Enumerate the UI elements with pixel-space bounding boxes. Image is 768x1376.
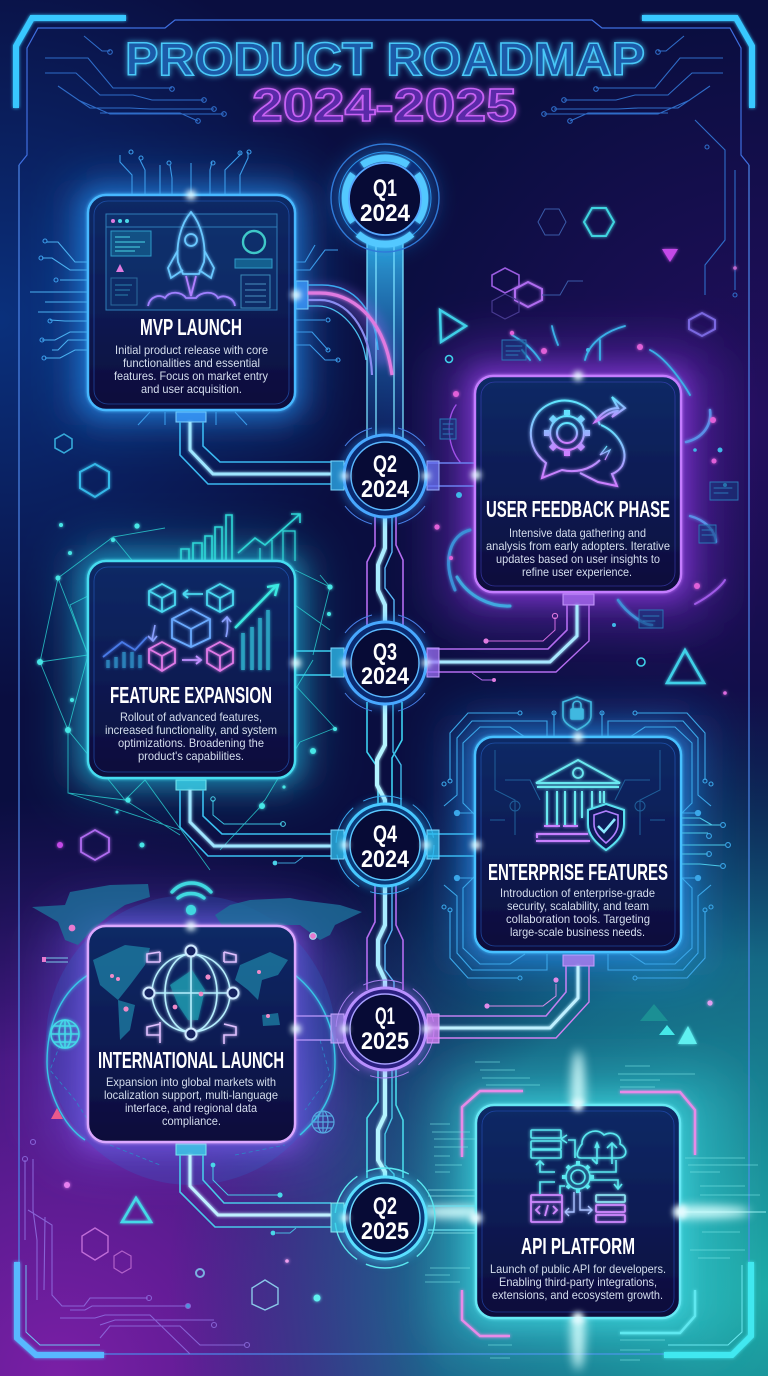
timeline node: Q4 2024: 2024	[361, 846, 410, 873]
panel: enterprise features	[475, 737, 681, 952]
description: updates based on user insights to	[496, 552, 660, 566]
description: Intensive data gathering and	[509, 526, 646, 540]
icon: API architecture	[531, 1130, 626, 1222]
connector: card 4 to Q1 2025	[428, 955, 594, 1038]
icon: globe with flags	[144, 946, 238, 1044]
decoration: hexagons and triangles	[55, 208, 715, 1310]
description: and user acquisition.	[141, 382, 242, 396]
description: extensions, and ecosystem growth.	[492, 1288, 663, 1302]
timeline node: Q2 2025: 2025	[361, 1218, 409, 1245]
timeline node: Q3 2024: Q3	[373, 639, 397, 666]
panel: international launch	[88, 926, 295, 1142]
corner circuit traces top	[45, 36, 737, 297]
description: Rollout of advanced features,	[120, 710, 262, 724]
panel: user feedback phase	[475, 376, 681, 592]
decoration: map inside card	[93, 945, 288, 1040]
description: refine user experience.	[522, 565, 632, 579]
icon: rocket dashboard	[106, 212, 277, 310]
heading: years: 2024-2025	[252, 79, 517, 131]
timeline node: Q4 2024	[331, 796, 439, 894]
description	[104, 1075, 278, 1128]
description: collaboration tools. Targeting	[506, 912, 650, 926]
heading: USER FEEDBACK PHASE	[486, 496, 670, 522]
decoration: card 6 pink frame and code	[425, 1062, 766, 1360]
description: increased functionality, and system	[105, 723, 277, 737]
description: Expansion into global markets with	[106, 1075, 276, 1089]
icon: small globe left	[51, 1020, 79, 1048]
heading: FEATURE EXPANSION	[110, 682, 272, 708]
icon: warning triangle	[51, 1108, 63, 1119]
decoration: dots	[64, 266, 737, 1302]
connector: card 1 to Q2 2024	[176, 412, 331, 484]
description: Enabling third-party integrations,	[499, 1275, 657, 1289]
description: features. Focus on market entry	[114, 369, 268, 383]
connector: card 1 to bus curve	[296, 281, 392, 375]
timeline node: Q2 2024	[331, 428, 439, 524]
bus glow	[375, 240, 395, 1180]
description	[114, 343, 268, 396]
timeline node: Q2 2024: Q2	[373, 451, 397, 478]
description: interface, and regional data	[125, 1101, 257, 1115]
decoration: card 4 circuit traces	[442, 711, 730, 980]
bus Q4 2024 to Q1 2025	[367, 885, 403, 990]
icon: map pins	[42, 925, 316, 962]
bus Q1 2025 to Q2 2025	[367, 1069, 403, 1178]
connector: card 3 to Q4 2024	[176, 780, 331, 865]
connector: card 5 to Q2 2025	[176, 1144, 331, 1235]
connector: Q2 2025 to card 6	[428, 1206, 476, 1230]
heading: product roadmap: PRODUCT ROADMAP	[125, 33, 645, 85]
description: optimizations. Broadening the	[118, 736, 264, 750]
bus Q1 2024 to Q2 2024	[367, 240, 403, 438]
icon: padlock shield	[563, 697, 591, 730]
timeline node: Q1 2025: 2025	[361, 1028, 409, 1055]
decoration: world map and sphere	[32, 883, 362, 1185]
connector: Q4 2024 to card 4	[428, 834, 476, 856]
description: analysis from early adopters. Iterative	[486, 539, 670, 553]
connector: Q2 2024 to card 2	[428, 463, 476, 486]
card 6 light burst	[415, 1050, 750, 1370]
description	[500, 886, 655, 939]
description: large-scale business needs.	[510, 925, 645, 939]
timeline node: Q2 2025	[331, 1168, 435, 1268]
heading: ENTERPRISE FEATURES	[488, 859, 668, 885]
bus Q3 2024 to Q4 2024	[367, 702, 402, 806]
description	[486, 526, 670, 579]
heading: INTERNATIONAL LAUNCH	[98, 1047, 284, 1073]
description: localization support, multi-language	[104, 1088, 278, 1102]
description: compliance.	[162, 1114, 221, 1128]
connector: card 2 to Q3 2024	[428, 594, 594, 682]
connector: card 3 to Q3 2024	[296, 651, 331, 675]
connectors: central timeline bus	[367, 240, 403, 1180]
icon: cubes and growth chart	[103, 584, 278, 671]
description: Launch of public API for developers.	[490, 1262, 666, 1276]
decoration: card 1 circuit traces	[30, 150, 340, 425]
decoration: network nodes	[37, 523, 337, 848]
timeline node: Q2 2025: Q2	[373, 1193, 397, 1220]
timeline node: Q3 2024	[331, 615, 439, 711]
decoration: map markers	[110, 970, 270, 1018]
timeline node: Q1 2025: Q1	[375, 1003, 395, 1030]
description	[105, 710, 277, 763]
decoration: card 2 swirl particles	[434, 326, 738, 628]
heading: MVP LAUNCH	[140, 314, 242, 340]
decoration: card 3 network	[40, 528, 335, 870]
panel: feature expansion	[88, 561, 295, 778]
panel: MVP launch	[88, 195, 295, 410]
icon: small globe right	[312, 1111, 334, 1133]
corner circuit traces bottom left	[22, 1140, 250, 1354]
timeline node: Q1 2024	[331, 144, 439, 252]
junction light hot spots	[186, 190, 687, 1324]
timeline node: Q2 2024: 2024	[361, 476, 410, 503]
description: product's capabilities.	[138, 749, 244, 763]
timeline node: Q1 2024: Q1	[373, 175, 397, 202]
heading: API PLATFORM	[521, 1233, 635, 1259]
timeline node: Q1 2024: 2024	[360, 200, 411, 227]
decoration: inner circuit	[490, 750, 665, 835]
icon: feedback gear bubbles	[531, 397, 625, 486]
description: security, scalability, and team	[507, 899, 649, 913]
timeline node: Q4 2024: Q4	[373, 821, 397, 848]
description	[490, 1262, 666, 1302]
icon: bank and shield	[536, 760, 624, 850]
icon: wifi	[172, 883, 211, 913]
connector: card 5 to Q1 2025	[296, 1016, 331, 1040]
description: functionalities and essential	[123, 356, 260, 370]
description: Introduction of enterprise-grade	[500, 886, 655, 900]
panel: API platform	[476, 1105, 680, 1318]
card glows	[50, 180, 730, 1350]
title	[125, 33, 645, 131]
decoration: growth bars above card 3	[181, 514, 300, 561]
description: Initial product release with core	[115, 343, 268, 357]
timeline node: Q3 2024: 2024	[361, 663, 410, 690]
bus Q2 2024 to Q3 2024	[367, 517, 403, 625]
timeline node: Q1 2025	[331, 980, 439, 1078]
